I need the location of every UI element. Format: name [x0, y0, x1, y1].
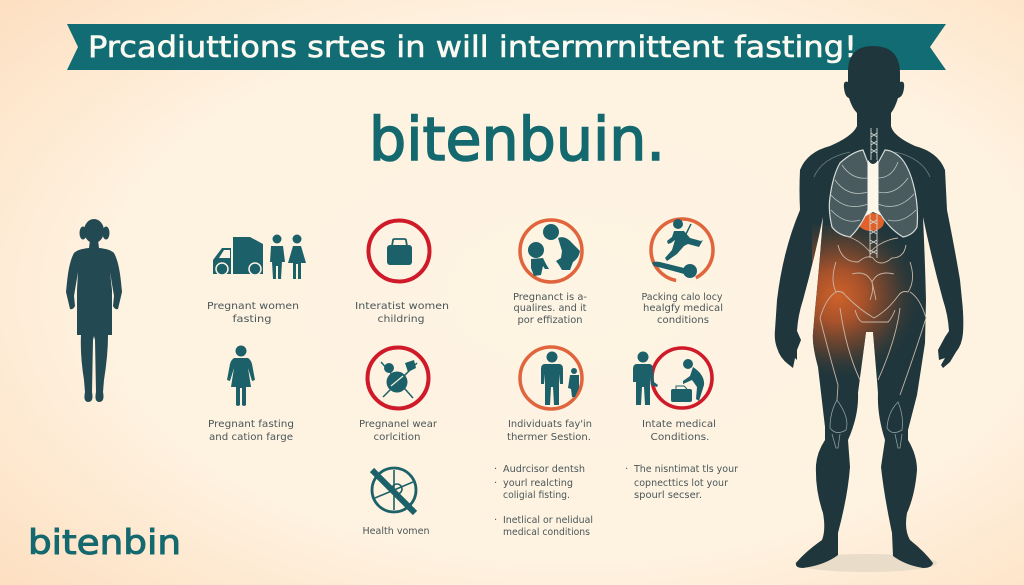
label line: conditions	[657, 315, 709, 326]
bullet list right: copnecttics lot your	[634, 478, 729, 489]
large body figure	[775, 46, 963, 568]
label line: thermer Sestion.	[507, 432, 591, 443]
bullet list left	[494, 464, 593, 538]
bottom logo: bitenbin	[28, 523, 181, 563]
label: Individuats fayꞌin	[508, 419, 592, 430]
main logo: bitenbuin.	[369, 105, 665, 175]
orange organ	[858, 213, 884, 231]
item: adult and child	[508, 347, 592, 430]
label line: qualires. and it	[514, 303, 587, 314]
item: mother and child	[513, 220, 587, 303]
label line: and cation farge	[209, 432, 293, 443]
icon: slashed tools	[372, 468, 416, 513]
item: woman	[208, 346, 294, 430]
label: Pregnanct is a-	[513, 292, 587, 303]
bullet list left: Audrcisor dentsh	[503, 464, 585, 475]
item: truck and people	[207, 234, 306, 312]
label: Pregnant fasting	[208, 419, 294, 430]
icon: person and carer in red ring	[633, 348, 712, 408]
lung ribs	[814, 152, 930, 221]
label: Pregnant women	[207, 301, 299, 312]
bullet list right	[625, 464, 739, 501]
lungs	[829, 150, 918, 237]
knee lines	[830, 400, 902, 448]
icon: woman	[227, 346, 255, 406]
icon: figures in orange ring	[520, 220, 582, 282]
spine	[870, 128, 877, 258]
intestines	[820, 236, 926, 400]
item: runner	[642, 219, 723, 303]
bullet list left: yourl realcting	[503, 478, 573, 489]
icon: plate and cutlery in red ring	[368, 348, 428, 408]
icon: runner in orange ring	[651, 219, 713, 281]
body silhouette	[775, 46, 963, 568]
label line: corlcition	[374, 432, 420, 443]
bullet list right: The nisntimat tls your	[633, 464, 739, 475]
label line: Conditions.	[650, 432, 710, 443]
label: Health vomen	[362, 526, 430, 537]
item: bag	[355, 220, 449, 312]
title text: Prcadiuttions srtes in will intermrnittent fasting!	[88, 30, 857, 64]
label: fasting: fasting	[232, 314, 272, 325]
bullet list left: coligial fisting.	[503, 490, 570, 501]
title banner	[67, 24, 946, 70]
icon: truck and people	[213, 234, 306, 279]
bullet list right: ·	[625, 464, 628, 475]
bullet list left: medical conditions	[503, 527, 590, 538]
item: food	[359, 348, 438, 430]
bullet list left: Inetlical or nelidual	[503, 515, 593, 526]
label line: healgfy medical	[643, 303, 723, 314]
label line: por effization	[518, 315, 582, 326]
bullet list left: ·	[494, 478, 497, 489]
label: childring: childring	[378, 314, 424, 325]
label: Interatist women	[355, 301, 449, 312]
abdominal glow	[812, 225, 913, 374]
trachea	[864, 160, 882, 217]
label: Intate medical	[642, 419, 716, 430]
small female silhouette	[66, 219, 122, 402]
bullet list left: ·	[494, 464, 497, 475]
item: bending person	[633, 348, 716, 430]
label: Packing calo locy	[642, 292, 723, 303]
icon: bag in red ring	[368, 220, 430, 282]
icon: adult and child in orange ring	[520, 347, 582, 409]
item: prohibited tools	[362, 468, 430, 537]
ground shadow	[795, 554, 937, 572]
label: Pregnanel wear	[359, 419, 438, 430]
bullet list right: spourl secser.	[634, 490, 702, 501]
bullet list left: ·	[494, 515, 497, 526]
